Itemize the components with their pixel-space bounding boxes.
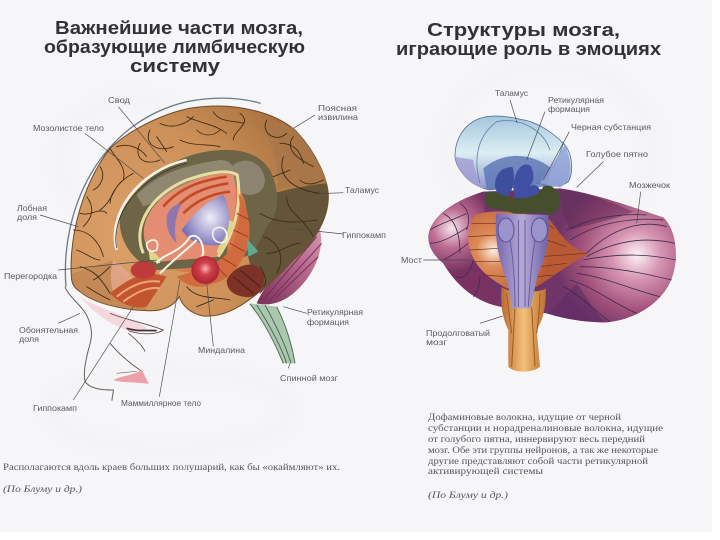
midbrain dark blue nuclei bbox=[495, 165, 540, 198]
labels: brainstem diagram: Черная субстанция bbox=[571, 122, 651, 132]
caption: right: мозг. Обе эти группы нейронов, а так же некоторые bbox=[428, 445, 659, 456]
caption: left: (По Блуму и др.) bbox=[3, 484, 82, 495]
caption: right: другие представляют собой части ретикулярной bbox=[428, 456, 649, 467]
labels: limbic diagram: Ретикулярная bbox=[307, 307, 363, 317]
medulla and midbrain ventral column bbox=[496, 213, 549, 308]
sulci lines bbox=[73, 112, 323, 307]
labels: brainstem diagram: Продолговатый bbox=[426, 328, 490, 338]
title: left bbox=[44, 18, 305, 76]
caption: left bbox=[3, 462, 340, 495]
thalamus bbox=[455, 116, 572, 190]
labels: limbic diagram: Маммиллярное тело bbox=[121, 398, 201, 408]
title: right: играющие роль в эмоциях bbox=[396, 39, 661, 59]
faint show-through shapes from the reverse page bbox=[50, 65, 655, 450]
labels: brainstem diagram: Ретикулярная bbox=[548, 95, 604, 105]
labels: limbic diagram: Таламус bbox=[345, 185, 379, 195]
labels: brainstem diagram: мозг bbox=[426, 337, 447, 347]
diagram: limbic system brain bbox=[40, 98, 343, 401]
labels: limbic diagram: Миндалина bbox=[198, 345, 245, 355]
labels: limbic diagram: формация bbox=[307, 317, 349, 327]
labels: brainstem diagram: Таламус bbox=[495, 88, 528, 98]
title: left: Важнейшие части мозга, bbox=[55, 18, 303, 38]
caption: right bbox=[428, 412, 664, 501]
caption: right: субстанции и норадреналиновые волокна, идущие bbox=[428, 423, 664, 434]
red structures: septum bbox=[131, 261, 156, 279]
labels: brainstem diagram: Мост bbox=[401, 255, 422, 265]
caption: right: от голубого пятна, иннервируют весь передний bbox=[428, 434, 646, 445]
labels: limbic diagram: Мозолистое тело bbox=[33, 123, 104, 133]
pons bbox=[468, 211, 588, 288]
labels: limbic diagram: Поясная bbox=[318, 103, 357, 113]
cerebral hemisphere bbox=[71, 106, 328, 316]
caption: left: Располагаются вдоль краев больших полушарий, как бы «окаймляют» их. bbox=[3, 462, 340, 473]
labels: limbic diagram: Гиппокамп bbox=[342, 230, 386, 240]
cerebellum fan bbox=[257, 230, 322, 304]
labels: brainstem diagram bbox=[401, 88, 670, 347]
caption: right: Дофаминовые волокна, идущие от черной bbox=[428, 412, 622, 423]
diagram: brainstem and cerebellum bbox=[423, 100, 676, 372]
labels: limbic diagram: извилина bbox=[318, 112, 358, 122]
leader lines left bbox=[40, 107, 343, 400]
head profile outline bbox=[65, 287, 163, 401]
red structure: amygdala bbox=[191, 256, 219, 284]
medulla stem bbox=[501, 287, 546, 372]
labels: limbic diagram: Лобная bbox=[17, 203, 47, 213]
labels: limbic diagram: Обонятельная bbox=[19, 325, 78, 335]
leader lines right bbox=[423, 100, 641, 323]
caption: right: активирующей системы bbox=[428, 466, 543, 477]
labels: limbic diagram: доля bbox=[17, 212, 37, 222]
labels: limbic diagram: Спинной мозг bbox=[280, 373, 338, 383]
caption: right: (По Блуму и др.) bbox=[428, 490, 508, 501]
labels: limbic diagram: доля bbox=[19, 334, 39, 344]
labels: limbic diagram: Гиппокамп bbox=[33, 403, 77, 413]
title: left: систему bbox=[130, 56, 220, 76]
labels: brainstem diagram: Голубое пятно bbox=[586, 149, 648, 159]
title: right bbox=[396, 20, 661, 59]
cerebellum bbox=[428, 188, 676, 322]
title: right: Структуры мозга, bbox=[427, 20, 620, 40]
locus and dark green band bbox=[485, 186, 560, 215]
title: left: образующие лимбическую bbox=[44, 37, 305, 57]
cerebral hemisphere outline arc bbox=[65, 98, 261, 287]
labels: limbic diagram bbox=[4, 95, 386, 413]
labels: brainstem diagram: формация bbox=[548, 104, 590, 114]
labels: brainstem diagram: Мозжечок bbox=[629, 180, 670, 190]
labels: limbic diagram: Свод bbox=[108, 95, 130, 105]
labels: limbic diagram: Перегородка bbox=[4, 271, 57, 281]
spinal cord bbox=[250, 303, 295, 363]
